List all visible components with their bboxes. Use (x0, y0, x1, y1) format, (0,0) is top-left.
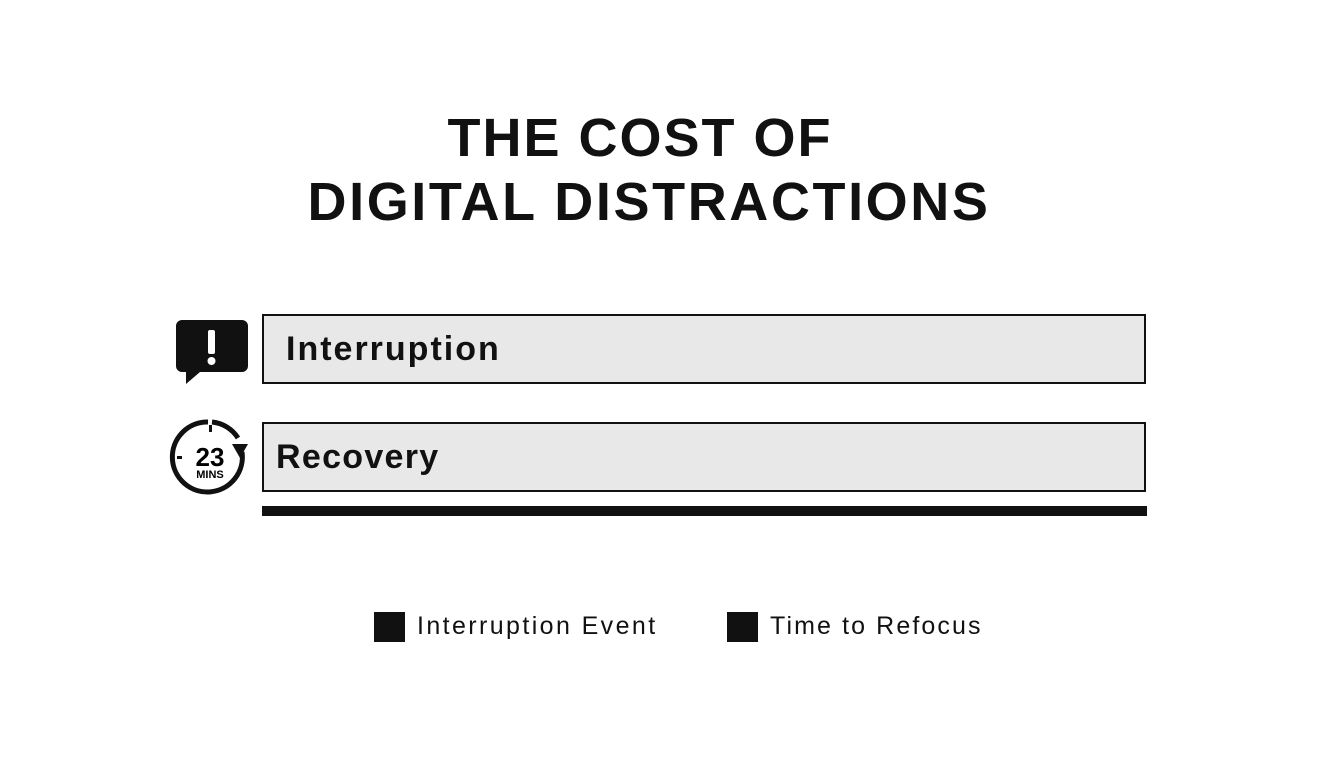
title: DIGITAL DISTRACTIONS (308, 172, 990, 232)
title (308, 108, 990, 232)
timeline line (262, 506, 1147, 516)
legend: Time to Refocus (770, 612, 983, 640)
legend (374, 612, 983, 642)
bar: interruption: Interruption (286, 330, 501, 368)
bar: recovery (262, 422, 1146, 492)
bar: recovery: Recovery (276, 438, 440, 476)
title: THE COST OF (448, 108, 832, 168)
icon: 23 mins clock: 23 (196, 442, 224, 472)
icon: 23 mins clock: MINS (196, 469, 224, 481)
legend: Interruption Event (417, 612, 658, 640)
bar: interruption (262, 314, 1146, 384)
icon: 23 mins clock (170, 420, 248, 494)
icon: alert speech bubble (176, 320, 248, 384)
